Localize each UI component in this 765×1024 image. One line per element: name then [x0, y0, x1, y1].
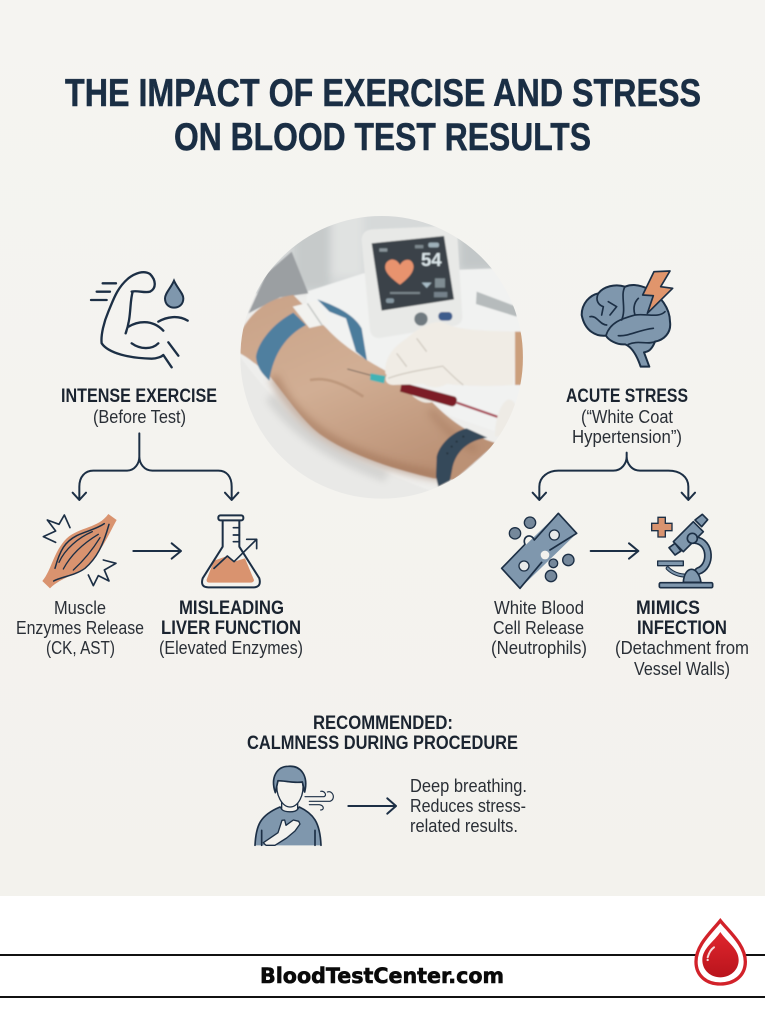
text: muscle enzymes release: Enzymes Release	[16, 618, 144, 638]
title	[65, 72, 701, 159]
arrow: branch to two outcomes	[533, 453, 695, 500]
text: deep breathing	[410, 776, 527, 836]
text: mimics infection: INFECTION	[637, 618, 727, 639]
icon: muscle with strain bursts	[42, 514, 117, 588]
heading: intense exercise: INTENSE EXERCISE	[61, 386, 217, 407]
text: misleading liver function: MISLEADING	[179, 598, 284, 619]
arrow: branch to two outcomes	[73, 433, 238, 500]
icon: blood vessel releasing white cells	[502, 513, 577, 588]
text: deep breathing: Reduces stress-	[410, 796, 526, 816]
needle and tube	[347, 369, 373, 376]
text: white blood cell release: (Neutrophils)	[491, 638, 587, 658]
heading: recommended: CALMNESS DURING PROCEDURE	[247, 733, 518, 754]
text: misleading liver function	[159, 598, 303, 658]
panel: recommended calmness	[247, 713, 527, 845]
text: mimics infection: MIMICS	[636, 598, 700, 619]
text: white blood cell release: Cell Release	[493, 618, 584, 638]
title: ON BLOOD TEST RESULTS	[174, 116, 591, 159]
text: muscle enzymes release	[16, 598, 144, 658]
footer	[0, 896, 765, 1024]
monitor	[362, 226, 462, 338]
arrow: breathing to result	[348, 798, 396, 814]
right column: acute stress	[491, 271, 749, 679]
sleeve	[248, 252, 308, 313]
heading: recommended	[247, 713, 518, 754]
heading: acute stress: ACUTE STRESS	[566, 386, 688, 407]
icon: blood drop logo	[696, 921, 745, 984]
tourniquet	[256, 313, 306, 381]
icon: flask with rising arrow	[202, 515, 260, 587]
icon: person breathing with hand on chest	[255, 766, 333, 845]
photo: blood draw from arm	[240, 216, 523, 498]
text: deep breathing: related results.	[410, 816, 518, 836]
text: mimics infection: (Detachment from	[615, 638, 749, 658]
wristband	[436, 428, 487, 487]
text: deep breathing: Deep breathing.	[410, 776, 527, 796]
text: misleading liver function: LIVER FUNCTION	[161, 618, 301, 639]
arrow: muscle to liver	[133, 543, 181, 559]
subheading: white coat hypertension	[572, 407, 682, 447]
icon: flexed arm with sweat drop	[91, 272, 188, 367]
heading: recommended: RECOMMENDED:	[313, 713, 453, 734]
subheading: before test: (Before Test)	[93, 407, 186, 427]
text: mimics infection: Vessel Walls)	[634, 659, 730, 679]
text: muscle enzymes release: (CK, AST)	[46, 638, 115, 658]
text: mimics infection	[615, 598, 749, 679]
arrow: white cells to infection	[591, 543, 638, 559]
text: white blood cell release	[491, 598, 587, 658]
text: muscle enzymes release: Muscle	[54, 598, 106, 618]
icon: microscope and medical cross	[652, 514, 713, 588]
text: misleading liver function: (Elevated Enzymes)	[159, 638, 303, 658]
subheading: white coat hypertension: Hypertension”)	[572, 427, 682, 447]
icon: brain with lightning bolt	[582, 271, 673, 367]
footer website text: BloodTestCenter.com	[260, 964, 504, 988]
subheading: white coat hypertension: (“White Coat	[581, 407, 673, 427]
gloved hand	[385, 322, 516, 387]
arm	[240, 295, 497, 480]
text: white blood cell release: White Blood	[494, 598, 584, 618]
left column: intense exercise	[16, 272, 303, 658]
monitor: 54	[421, 249, 442, 270]
